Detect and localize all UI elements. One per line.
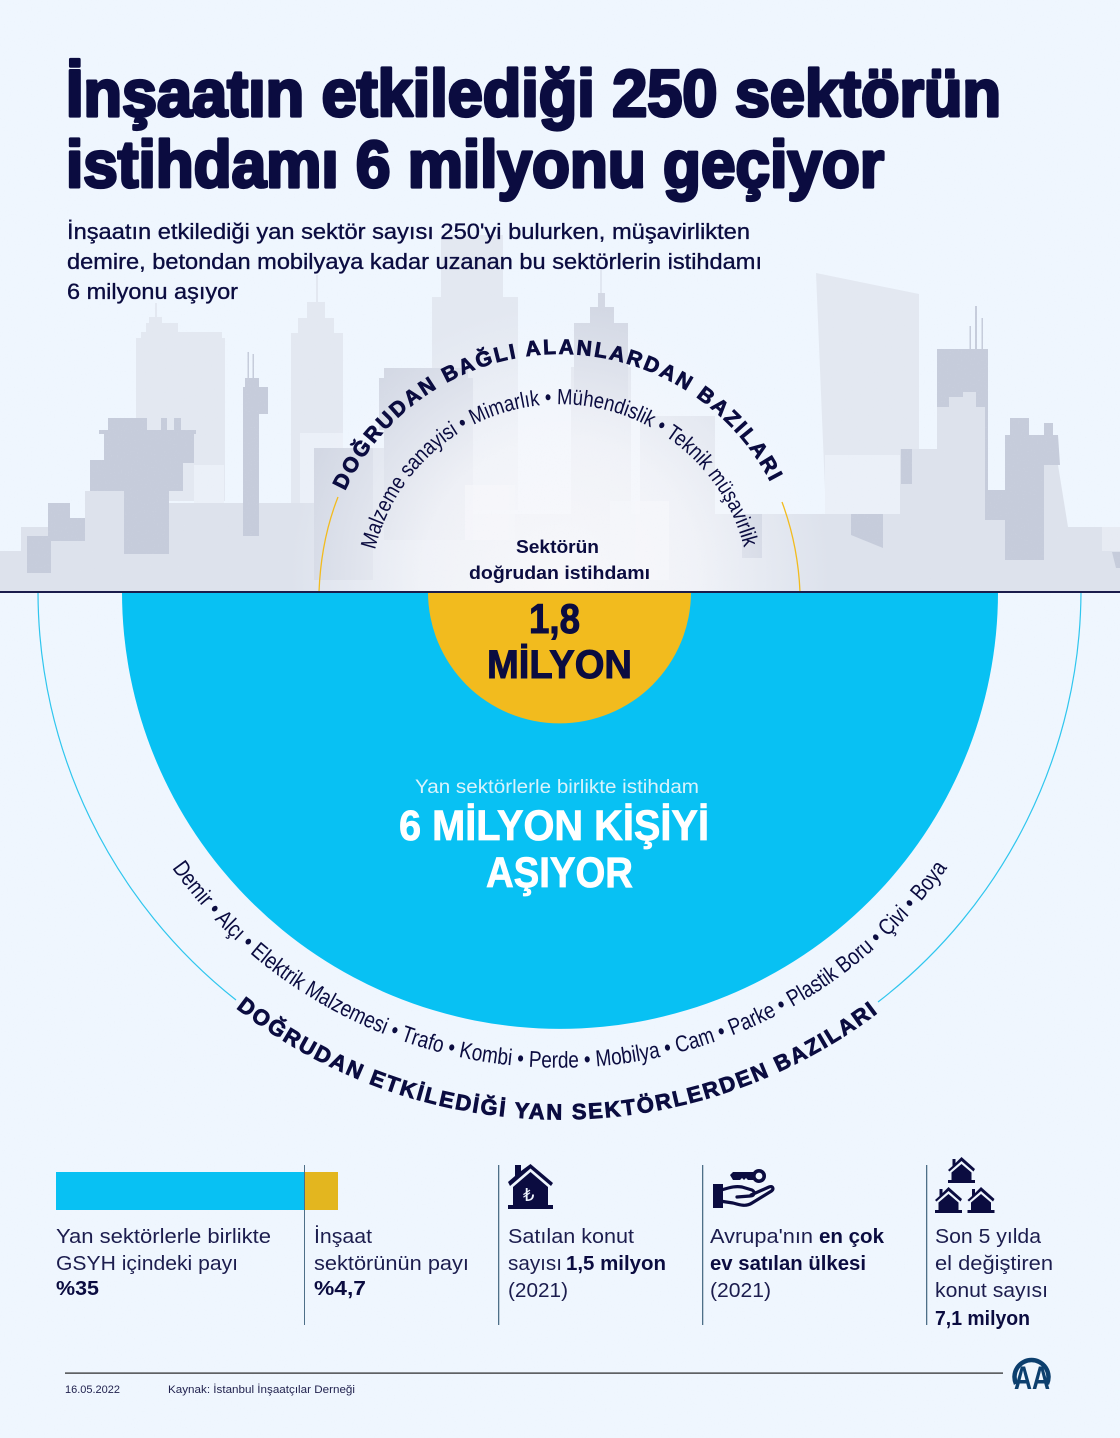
skyline illustration [0,235,1120,592]
stat: most houses sold in Europe: Avrupa'nın [710,1226,813,1248]
direct employment label [469,537,650,583]
subtitle text: demire, betondan mobilyaya kadar uzanan bu sektörlerin istihdamı [67,249,762,274]
stat: houses changing hands: Son 5 yılda [935,1226,1042,1248]
stat: GDP share with side sectors: GSYH içindeki payı [56,1253,238,1275]
direct employment value [487,595,632,687]
stat: most houses sold in Europe: en çok [819,1226,885,1248]
stat: houses sold: (2021) [508,1280,568,1302]
source: Kaynak: İstanbul İnşaatçılar Derneği [168,1383,355,1396]
stat: most houses sold in Europe: (2021) [710,1280,771,1302]
icon: house with lira [508,1164,553,1209]
date: 16.05.2022 [65,1384,120,1396]
title [66,56,1001,201]
yellow thin arc [319,497,800,592]
bar: GDP share [56,1172,338,1210]
curved heading: direct fields: DOĞRUDAN BAĞLI ALANLARDAN BAZILARI [332,339,783,490]
stat: construction share [314,1225,469,1300]
column dividers [304,1165,927,1325]
stat: GDP share with side sectors: %35 [56,1278,99,1300]
stat: houses sold: sayısı [508,1253,562,1275]
stat: construction share: sektörünün payı [314,1253,469,1275]
icon: house with lira: ₺ [523,1185,534,1206]
subtitle text: 6 milyonu aşıyor [67,279,238,304]
total employment text [399,777,709,897]
icon: three houses [935,1157,994,1213]
subtitle text: İnşaatın etkilediği yan sektör sayısı 250'yi bulurken, müşavirlikten [67,219,750,244]
direct employment value: 1,8 [529,595,580,642]
stat: houses changing hands: 7,1 milyon [935,1308,1030,1330]
cyan thin arc [38,592,1081,1002]
stat: houses changing hands [935,1226,1053,1330]
stat: construction share: İnşaat [314,1225,372,1248]
stat: houses sold [508,1226,666,1302]
title: istihdamı 6 milyonu geçiyor [66,127,884,201]
subtitle text [67,219,762,304]
yellow half circle: direct employment [428,592,691,723]
stat: houses sold: Satılan konut [508,1226,634,1248]
total employment text: Yan sektörlerle birlikte istihdam [415,777,699,798]
stat: houses changing hands: el değiştiren [935,1253,1053,1275]
icon: hand holding key [713,1171,773,1208]
total employment text: AŞIYOR [486,849,633,897]
stat: GDP share with side sectors: Yan sektörlerle birlikte [56,1226,271,1248]
stat: houses changing hands: konut sayısı [935,1280,1048,1302]
total employment text: 6 MİLYON KİŞİYİ [399,802,709,850]
direct employment value: MİLYON [487,643,632,687]
horizon line [0,591,1120,593]
blue half circle: indirect employment [122,592,998,1029]
logo: AA: AA [1014,1360,1050,1396]
curved list: indirect sectors: Demir • Alçı • Elektrik Malzemesi • Trafo • Kombi • Perde • Mobilya • Cam • Parke • Plastik Boru • Çivi • Boya [172,860,948,1068]
stat: GDP share with side sectors [56,1226,271,1300]
direct employment label: Sektörün [516,537,599,557]
direct employment label: doğrudan istihdamı [469,563,650,583]
stat: houses sold: 1,5 milyon [566,1253,666,1275]
title: İnşaatın etkilediği 250 sektörün [66,56,1001,130]
stat: most houses sold in Europe: ev satılan ülkesi [710,1253,866,1275]
curved heading: indirect sectors: DOĞRUDAN ETKİLEDİĞİ YAN SEKTÖRLERDEN BAZILARI [236,996,878,1120]
curved list: direct fields: Malzeme sanayisi • Mimarlık • Mühendislik • Teknik müşavirlik [360,389,758,548]
stat: construction share: %4,7 [314,1278,366,1300]
stat: most houses sold in Europe [710,1226,885,1302]
footer rule [65,1372,1003,1374]
